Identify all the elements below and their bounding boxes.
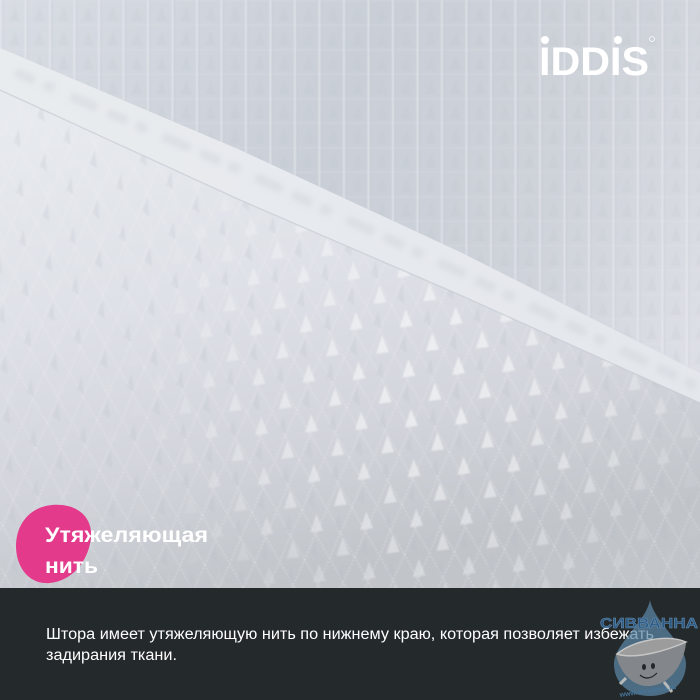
watermark bathtub — [616, 638, 686, 692]
heading: weighting thread — [45, 524, 208, 578]
logo: IDDIS: IDDIS — [539, 40, 649, 84]
fabric: diagonal fold — [0, 48, 700, 403]
heading: weighting thread: нить — [45, 555, 98, 578]
description text: Штора имеет утяжеляющую нить по нижнему краю, которая позволяет избежать — [46, 626, 654, 643]
badge: pink blob — [16, 505, 91, 583]
footer panel — [0, 588, 700, 700]
description text: задирания ткани. — [46, 647, 177, 664]
watermark: Sivvanna mascot — [600, 600, 699, 699]
fabric: lower section — [0, 90, 700, 588]
watermark drop — [614, 600, 686, 696]
watermark brand name: СИВВАННА — [600, 616, 699, 632]
fabric: upper grid section behind the fold — [0, 0, 700, 373]
heading: weighting thread: Утяжеляющая — [45, 524, 208, 547]
description text — [46, 626, 654, 664]
watermark website: www.sivvanna.ru — [618, 684, 677, 699]
